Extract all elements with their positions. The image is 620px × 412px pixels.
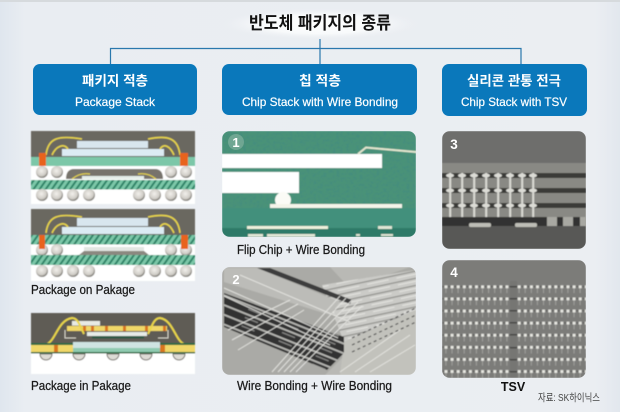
header: TSV: Chip Stack with TSV bbox=[461, 95, 567, 109]
title: 반도체 패키지의 종류 bbox=[249, 13, 391, 33]
diagram: package in package bbox=[31, 313, 195, 374]
source credit: 자료: SK하이닉스 bbox=[538, 391, 600, 404]
header: chip stack: 칩 적층 bbox=[299, 74, 341, 88]
header: chip stack: Chip Stack with Wire Bonding bbox=[242, 95, 398, 109]
header: package stack bbox=[33, 64, 197, 115]
header: chip stack bbox=[222, 64, 417, 115]
diagram: package on package B bbox=[31, 209, 195, 281]
number 1: 1 bbox=[232, 135, 240, 150]
number 1 bbox=[228, 134, 244, 150]
header: package stack: Package Stack bbox=[75, 95, 156, 109]
connector lines bbox=[110, 39, 521, 64]
header: TSV bbox=[442, 64, 587, 116]
photo 3: TSV cross section bbox=[442, 131, 588, 249]
label: flip chip + wire bonding: Flip Chip + Wire Bonding bbox=[237, 243, 365, 257]
label: package in package: Package in Pakage bbox=[31, 379, 131, 393]
number 3: 3 bbox=[450, 137, 458, 152]
header: TSV: 실리콘 관통 전극 bbox=[467, 74, 561, 88]
photo 2: wire bonding + wire bonding bbox=[222, 267, 416, 375]
photo 1: flip chip + wire bonding bbox=[222, 131, 416, 237]
label: TSV: TSV bbox=[501, 380, 526, 394]
number 4: 4 bbox=[450, 265, 458, 280]
label: package on package: Package on Pakage bbox=[31, 283, 135, 297]
diagram: package on package A bbox=[31, 131, 195, 204]
label: wire bonding + wire bonding: Wire Bonding + Wire Bonding bbox=[237, 379, 392, 393]
header: package stack: 패키지 적층 bbox=[82, 74, 148, 88]
photo 4: TSV array bbox=[442, 260, 586, 378]
number 2: 2 bbox=[232, 272, 240, 287]
